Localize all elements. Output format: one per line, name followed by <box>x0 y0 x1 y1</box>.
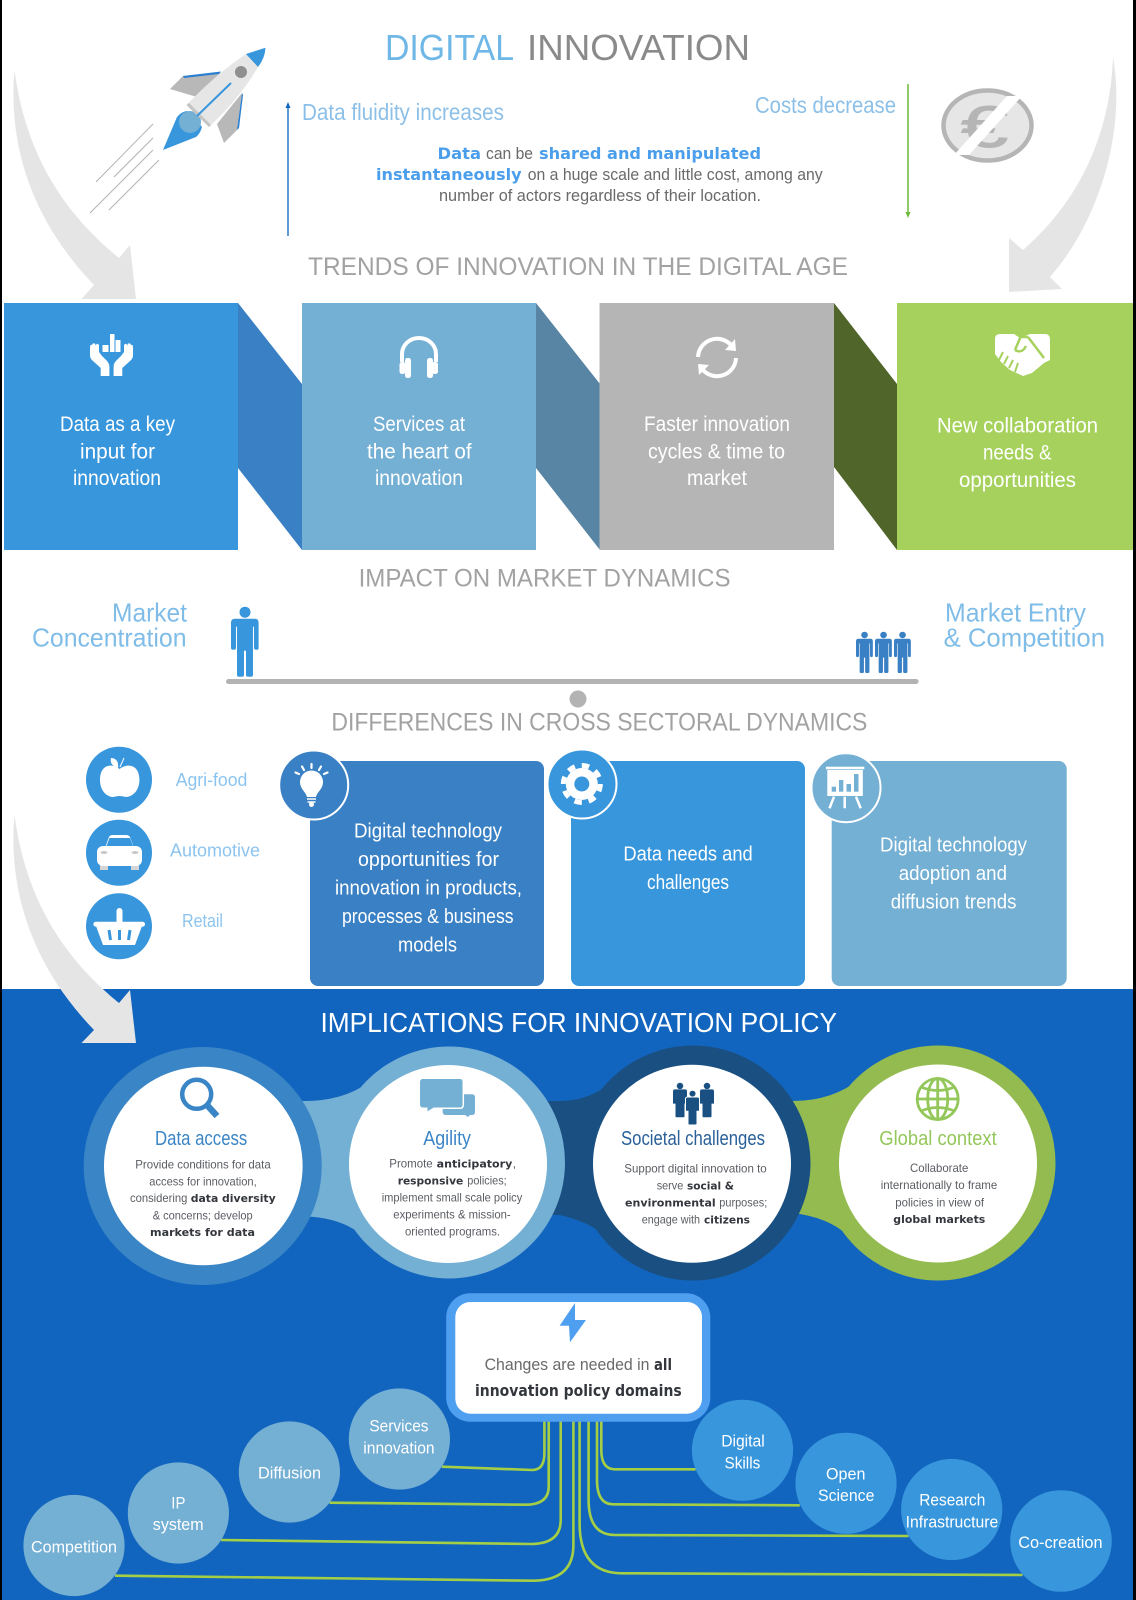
label: Data as a key <box>60 413 175 436</box>
body text <box>624 1161 767 1227</box>
icon: handshake <box>995 334 1050 376</box>
panel: services at the heart <box>302 303 536 550</box>
domain: diffusion: Diffusion <box>258 1464 321 1483</box>
label: market entry and competition <box>944 598 1105 652</box>
icon: speech bubbles <box>419 1078 475 1117</box>
body text: markets for data <box>150 1226 255 1239</box>
heading: Agility <box>423 1128 471 1150</box>
callout text: all <box>654 1355 672 1374</box>
arrow: big curved right <box>1009 57 1116 292</box>
text block: data statement <box>376 144 823 205</box>
label: adoption and <box>899 863 1007 885</box>
heading: Data access <box>155 1128 247 1150</box>
sector: automotive <box>86 820 260 886</box>
icon: group of people <box>673 1083 714 1125</box>
icon: magnifying glass <box>182 1080 217 1116</box>
domain: digital skills <box>692 1400 793 1501</box>
body text: policies in view of <box>895 1195 985 1209</box>
panel: data as a key input <box>4 303 238 550</box>
icon: presentation easel <box>812 753 880 822</box>
heading: Societal challenges <box>621 1128 765 1150</box>
panel: adoption and diffusion trends <box>812 753 1067 986</box>
domain: research infrastructure <box>901 1459 1002 1560</box>
label: market concentration <box>32 598 188 652</box>
domain: open science <box>795 1433 897 1534</box>
label: Digital technology <box>354 820 502 842</box>
sector: retail <box>86 893 223 959</box>
panel: agility <box>295 1046 565 1278</box>
callout text <box>475 1355 682 1400</box>
body text: engage with <box>642 1213 700 1227</box>
label: market concentration: Concentration <box>32 622 186 652</box>
callout text: innovation policy domains <box>475 1381 682 1400</box>
icon: three people <box>856 632 911 673</box>
label: processes & business <box>342 906 514 928</box>
label: challenges <box>647 872 729 894</box>
body text: social & <box>687 1180 734 1193</box>
domain: co-creation <box>1010 1490 1112 1592</box>
label: innovation in products, <box>335 877 522 899</box>
icon: basket <box>93 908 145 945</box>
domain: services innovation <box>349 1388 450 1490</box>
arrow: data fluidity increases <box>286 102 290 236</box>
text block: data statement: on a huge scale and little cost, among any <box>528 166 823 184</box>
body text: experiments & mission- <box>393 1208 511 1222</box>
icon: single person <box>231 607 259 677</box>
panel: societal challenges <box>540 1046 810 1280</box>
label: Services at <box>373 413 465 436</box>
label: Digital technology <box>880 835 1027 857</box>
label <box>367 413 472 490</box>
arrow: costs decrease <box>906 84 910 218</box>
domain: competition: Competition <box>31 1537 117 1556</box>
callout text: Changes are needed in <box>485 1355 650 1374</box>
label: models <box>398 934 457 956</box>
body text: considering <box>130 1191 187 1205</box>
text block: data statement: instantaneously <box>376 165 522 184</box>
label: market concentration: Market <box>112 598 188 628</box>
domain: ip system: IP <box>171 1493 185 1512</box>
body text: , <box>513 1156 516 1170</box>
label: cycles & time to <box>648 440 785 464</box>
domain: open science: Open <box>826 1464 865 1483</box>
domain: services innovation: innovation <box>363 1438 435 1457</box>
panel: global context <box>780 1046 1056 1280</box>
body text: Promote <box>389 1156 433 1170</box>
label <box>623 844 753 894</box>
label: innovation <box>375 467 463 490</box>
icon: apple <box>100 758 139 797</box>
icon: lightning bolt <box>560 1303 586 1342</box>
domain: open science: Science <box>818 1486 874 1505</box>
label: Data needs and <box>623 844 753 866</box>
label: Retail <box>182 911 223 931</box>
icon: refresh arrows <box>698 339 736 376</box>
body text: serve <box>657 1179 684 1193</box>
body text: Collaborate <box>910 1161 969 1175</box>
icon: crossed out euro coin: € <box>961 95 1008 160</box>
label: input for <box>80 440 155 464</box>
label: costs decrease: Costs decrease <box>755 92 896 118</box>
label: New collaboration <box>937 414 1098 438</box>
body text: responsive <box>398 1174 463 1187</box>
body text: oriented programs. <box>405 1225 500 1239</box>
heading: trends of innovation: TRENDS OF INNOVATION IN THE DIGITAL AGE <box>308 253 848 281</box>
body text <box>130 1157 276 1239</box>
body text: access for innovation, <box>149 1174 257 1188</box>
body text <box>881 1161 998 1226</box>
title: DIGITAL <box>385 27 514 68</box>
heading: differences in cross sectoral dynamics: DIFFERENCES IN CROSS SECTORAL DYNAMICS <box>331 709 867 737</box>
domain: digital skills: Skills <box>724 1453 760 1472</box>
label: diffusion trends <box>891 891 1016 913</box>
domain: diffusion <box>239 1421 340 1523</box>
label: market <box>687 467 747 490</box>
body text: internationally to frame <box>881 1178 998 1192</box>
body text: purposes; <box>719 1196 767 1210</box>
heading: impact on market dynamics: IMPACT ON MARKET DYNAMICS <box>359 564 731 592</box>
body text: environmental <box>625 1197 716 1210</box>
label: market entry and competition: & Competition <box>944 622 1105 652</box>
label <box>335 820 522 956</box>
text block: data statement: can be <box>486 145 533 163</box>
body text: anticipatory <box>437 1157 512 1170</box>
domain: competition <box>23 1495 125 1596</box>
panel: trend connectors <box>238 303 897 550</box>
label: opportunities <box>959 469 1076 492</box>
label <box>644 413 790 490</box>
body text: & concerns; develop <box>153 1208 253 1222</box>
arrow: big curved left <box>13 70 136 299</box>
body text: Provide conditions for data <box>135 1157 271 1171</box>
title <box>385 27 750 68</box>
sector: agri-food <box>86 747 247 813</box>
label: Automotive <box>170 841 260 861</box>
panel: digital technology opportunities <box>279 750 544 986</box>
label: data fluidity increases: Data fluidity increases <box>302 99 504 125</box>
body text: implement small scale policy <box>382 1191 522 1205</box>
panel: new collaboration needs <box>897 303 1133 550</box>
label: market entry and competition: Market Entry <box>945 598 1086 628</box>
text block: data statement: Data <box>438 144 481 163</box>
body text: global markets <box>893 1213 986 1226</box>
arrow: big curved lower left <box>13 815 136 1043</box>
label: needs & <box>983 442 1052 464</box>
domain: digital skills: Digital <box>721 1432 765 1451</box>
label <box>880 835 1027 913</box>
label: Faster innovation <box>644 413 790 436</box>
text block: data statement: number of actors regardless of their location. <box>439 187 761 205</box>
label: the heart of <box>367 440 472 464</box>
icon: light bulb <box>279 750 348 820</box>
label: innovation <box>73 467 161 490</box>
icon: globe <box>917 1078 958 1120</box>
domain: research infrastructure: Research <box>919 1490 985 1509</box>
label <box>937 414 1098 492</box>
domain: research infrastructure: Infrastructure <box>906 1512 998 1531</box>
icon: gear <box>548 750 616 818</box>
chart: balance scale bar and pivot <box>226 679 919 708</box>
icon: hands holding data bars <box>90 334 133 376</box>
panel: data needs and challenges <box>548 750 805 986</box>
domain: co-creation: Co-creation <box>1018 1533 1103 1552</box>
body text: Support digital innovation to <box>624 1161 767 1175</box>
label: opportunities for <box>358 849 499 871</box>
heading: implications for innovation policy: IMPLICATIONS FOR INNOVATION POLICY <box>320 1007 837 1038</box>
icon: crossed out euro coin <box>944 90 1032 160</box>
label <box>60 413 175 490</box>
panel: faster innovation cycles <box>600 303 834 550</box>
callout: changes are needed <box>446 1293 710 1422</box>
body text: citizens <box>704 1214 750 1227</box>
icon: rocket <box>90 48 266 213</box>
body text <box>382 1156 522 1239</box>
text block: data statement: shared and manipulated <box>539 144 761 163</box>
heading: Global context <box>879 1128 997 1150</box>
icon: headphones <box>400 338 438 378</box>
panel: data access <box>84 1047 322 1285</box>
label: Agri-food <box>176 770 247 790</box>
panel: policy background <box>2 989 1133 1600</box>
domain: ip system: system <box>153 1515 204 1534</box>
domain: ip system <box>128 1462 229 1564</box>
icon: car <box>97 835 142 870</box>
body text: policies; <box>467 1173 507 1187</box>
domain: services innovation: Services <box>369 1417 428 1436</box>
body text: data diversity <box>191 1192 276 1205</box>
title: INNOVATION <box>527 27 750 68</box>
connectors: policy domain lines <box>115 1421 1022 1581</box>
